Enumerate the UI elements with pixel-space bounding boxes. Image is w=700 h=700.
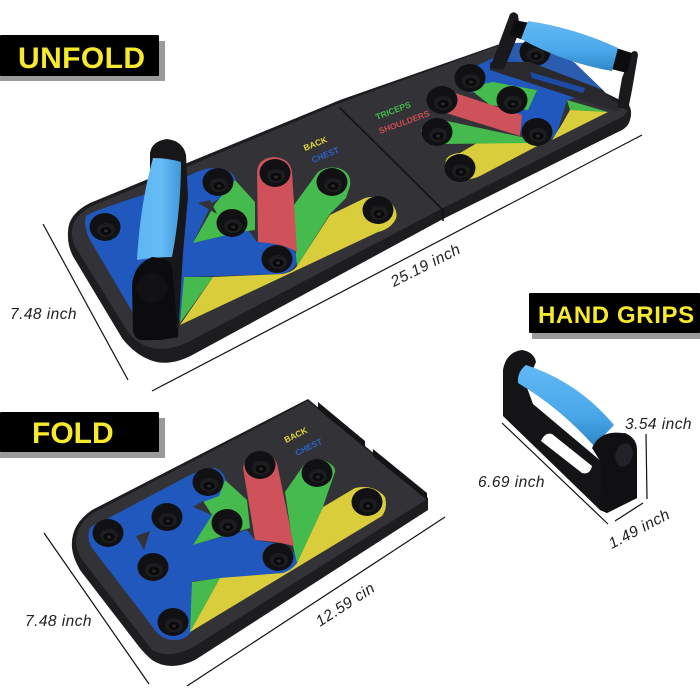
hidden hole [520, 38, 550, 66]
heading: unfold [0, 35, 165, 81]
line: unfold width [43, 224, 128, 380]
slot [541, 434, 592, 473]
dimension lines [43, 135, 647, 686]
line: fold length [187, 517, 445, 686]
board labels [302, 99, 431, 165]
label: fold width: 7.48 inch [25, 613, 92, 630]
green upper fan [193, 480, 250, 545]
blue zone [88, 468, 297, 640]
heading: fold: FOLD [32, 417, 114, 450]
hand grip product [503, 350, 637, 513]
heading: hand grips [529, 293, 700, 339]
board top face [76, 401, 427, 654]
red arm [428, 89, 522, 136]
holes [90, 213, 120, 241]
end post [592, 433, 637, 513]
folded board [72, 399, 428, 666]
left hand grip [132, 139, 188, 340]
frame band [490, 62, 622, 112]
left panel colours [85, 157, 397, 325]
label: chest: CHEST [293, 436, 324, 458]
green top [467, 82, 537, 110]
board body [68, 44, 631, 363]
label: back: BACK [282, 425, 310, 445]
green lower wedge [190, 578, 220, 632]
green right [567, 100, 608, 112]
label: fold length: 12.59 cin [313, 580, 378, 630]
heading: fold [0, 412, 165, 458]
green arm [294, 168, 350, 266]
line: grip height [646, 434, 647, 499]
board labels [282, 425, 324, 458]
label: grip depth: 1.49 inch [606, 506, 673, 553]
label: grip height: 3.54 inch [625, 416, 692, 433]
green arm [285, 460, 335, 563]
green arm [421, 121, 538, 144]
line: grip length [502, 423, 608, 524]
right post [617, 51, 638, 110]
right hand grip [490, 12, 638, 112]
label: grip length: 6.69 inch [478, 474, 545, 491]
line: grip depth [615, 503, 643, 521]
label: unfold width: 7.48 inch [10, 306, 77, 323]
unfolded board [68, 12, 638, 363]
line: fold width [44, 533, 149, 684]
dimension labels [10, 241, 692, 630]
end cap left [510, 20, 530, 40]
green upper fan [193, 180, 255, 243]
notch [198, 200, 217, 214]
heading: hand grips: HAND GRIPS [538, 302, 695, 329]
grip frame [150, 139, 188, 338]
holes [454, 64, 486, 92]
grip foam [137, 158, 181, 260]
grip lower post [132, 257, 178, 340]
hinge tabs [318, 402, 427, 500]
label: unfold length: 25.19 inch [387, 241, 464, 291]
blue zone [85, 168, 297, 320]
foam [518, 365, 614, 446]
end cap right [611, 48, 632, 73]
translucent triangle [507, 42, 603, 90]
socket [613, 441, 635, 469]
yellow arm [445, 143, 543, 180]
line: unfold length [152, 135, 642, 391]
label: back: BACK [302, 134, 329, 153]
holes [92, 519, 124, 547]
triangle markers [136, 501, 212, 550]
foam [521, 21, 618, 71]
green lower wedge [180, 277, 213, 323]
red arm [243, 452, 294, 546]
label: triceps: TRICEPS [374, 99, 412, 122]
red arm [257, 157, 297, 252]
slot [530, 72, 585, 93]
yellow arm [190, 487, 386, 632]
board body [72, 399, 428, 666]
board top face [72, 46, 627, 349]
fold seam [339, 107, 443, 221]
label: shoulders: SHOULDERS [377, 108, 431, 136]
right panel colours [421, 50, 608, 182]
frame [503, 350, 637, 513]
blue zone [457, 50, 603, 145]
heading: unfold: UNFOLD [18, 42, 145, 75]
yellow arm [180, 197, 397, 325]
grip socket [137, 274, 167, 302]
yellow right [552, 110, 608, 140]
left post [490, 12, 520, 70]
label: chest: CHEST [310, 144, 341, 165]
